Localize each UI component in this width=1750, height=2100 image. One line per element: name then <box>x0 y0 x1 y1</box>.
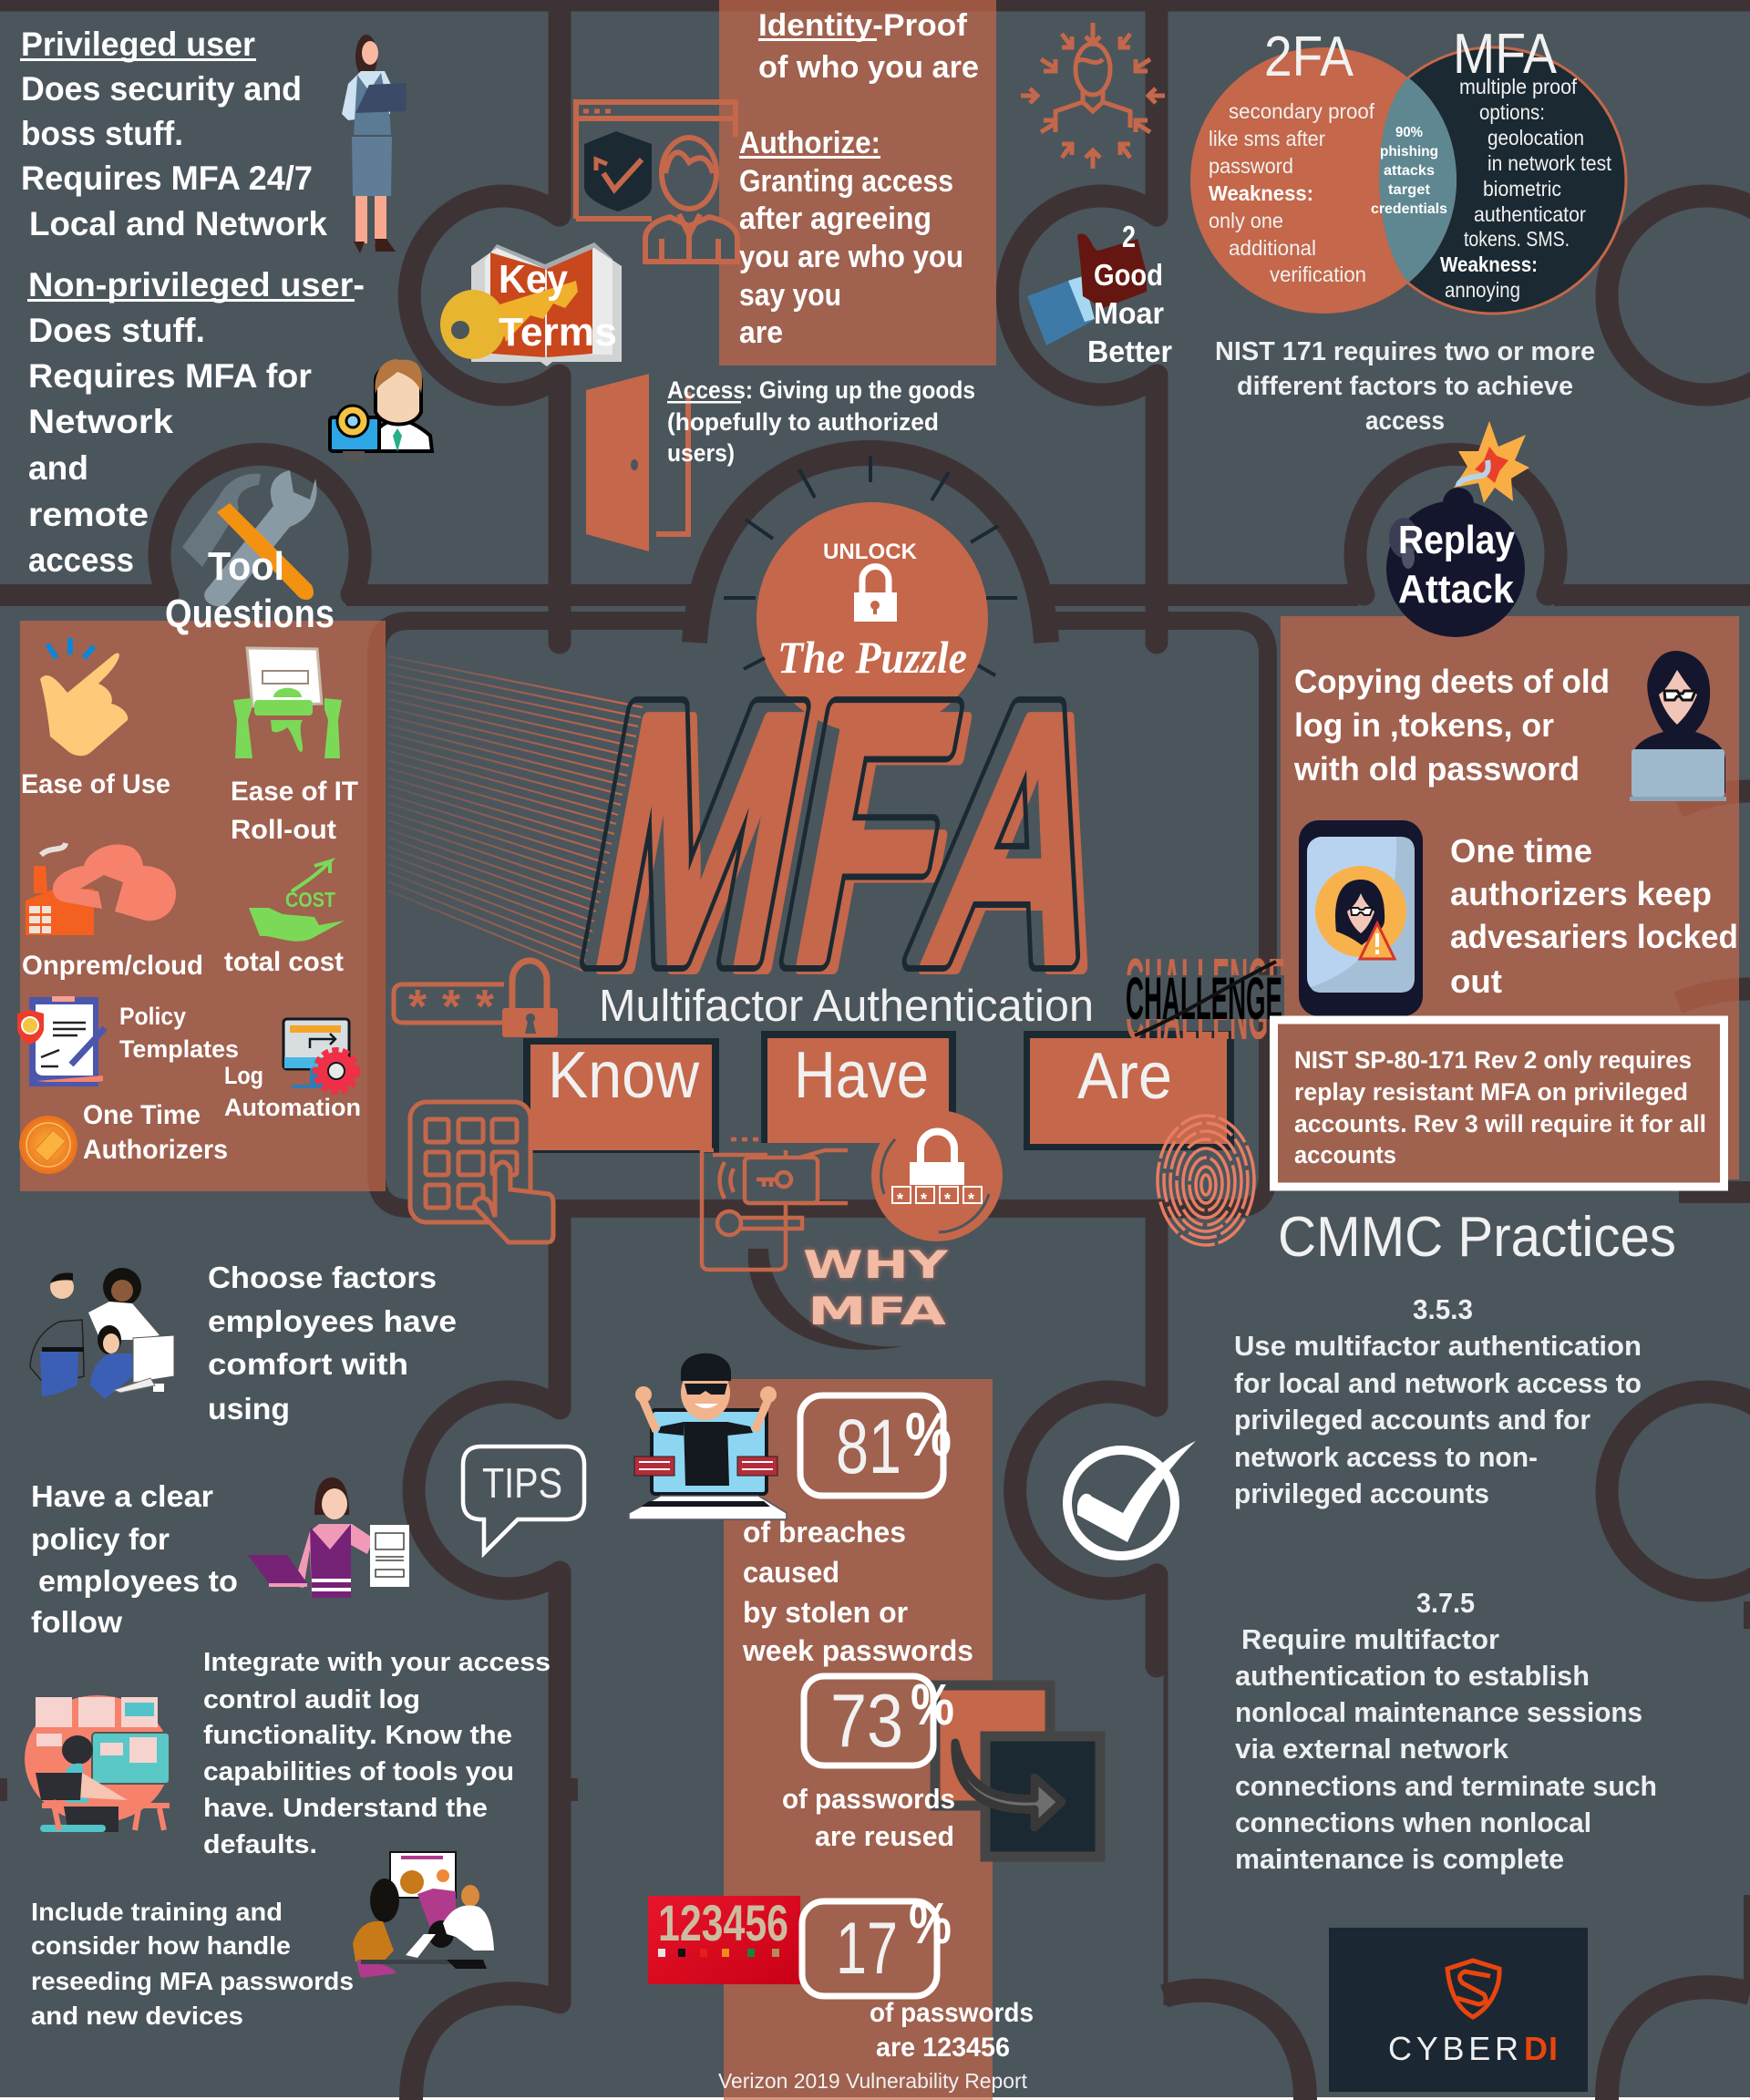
icon: keypad with finger <box>410 1102 553 1242</box>
text: tip integrate with audit log <box>203 1648 551 1859</box>
venn diagram: 2FA and MFA: tokens. SMS. <box>1464 227 1570 251</box>
text: 2 good moar better: Good <box>1094 258 1163 292</box>
text: non-privileged user: and <box>28 449 88 487</box>
icon: phone with hacker warning <box>1299 820 1423 1016</box>
venn diagram: 2FA and MFA: biometric <box>1483 177 1561 201</box>
text: non-privileged user: access <box>28 541 134 579</box>
venn diagram: 2FA and MFA: like sms after <box>1209 127 1325 150</box>
text: access definition <box>667 376 975 467</box>
image: red 123456: 123456 <box>658 1894 788 1951</box>
text: non-privileged user: Network <box>28 403 173 440</box>
text: practice 3.5.3: privileged accounts and for <box>1234 1404 1590 1436</box>
icon: circle lock with asterisks: * <box>921 1190 927 1209</box>
venn diagram: 2FA and MFA: credentials <box>1371 201 1447 217</box>
heading: CMMC practices: CMMC Practices <box>1278 1206 1676 1269</box>
text: one time authorizers: Authorizers <box>83 1135 228 1165</box>
venn diagram: 2FA and MFA: options: <box>1479 100 1545 124</box>
text: privileged user: Local and Network <box>29 205 327 242</box>
venn diagram: 2FA and MFA: Weakness: <box>1209 181 1313 205</box>
text: practice 3.7.5: 3.7.5 <box>1416 1587 1475 1619</box>
icon: cost hand: COST <box>285 888 335 911</box>
text: policy templates: Policy <box>119 1003 186 1030</box>
icon: thumbs up <box>1027 233 1147 345</box>
heading: why MFA: WHY <box>803 1242 949 1287</box>
stat: 17 percent 123456 <box>802 1890 1034 2063</box>
icon: TIPS speech bubble: TIPS <box>482 1459 562 1507</box>
text: one time authorizers: One time <box>1450 832 1592 870</box>
text: practice 3.5.3 <box>1234 1293 1642 1509</box>
text: practice 3.7.5: maintenance is complete <box>1235 1843 1564 1875</box>
text: privileged user: Does security and <box>21 70 302 108</box>
text: practice 3.5.3: for local and network access to <box>1234 1367 1642 1399</box>
text: practice 3.5.3: 3.5.3 <box>1413 1293 1473 1325</box>
panel: why MFA statistics <box>724 1379 993 2100</box>
stat: 17 percent 123456: of passwords <box>870 1998 1034 2028</box>
text: policy templates <box>119 1003 239 1063</box>
stat: 81 percent of breaches: caused <box>743 1556 839 1589</box>
text: tip integrate with audit log: capabilities of tools you <box>203 1757 514 1786</box>
text: tip choose factors: comfort with <box>208 1347 408 1381</box>
text: tip training: reseeding MFA passwords <box>31 1967 354 1995</box>
text: practice 3.7.5 <box>1235 1587 1657 1875</box>
stat: 73 percent reused: 73 <box>830 1678 903 1763</box>
text: tip choose factors: employees have <box>208 1304 457 1338</box>
stat: 73 percent reused: of passwords <box>782 1783 955 1815</box>
venn diagram: 2FA and MFA: verification <box>1270 262 1366 286</box>
text: NIST 171 requirement: different factors to achieve <box>1237 372 1573 401</box>
speed lines behind MFA <box>388 656 643 971</box>
stat: 81 percent of breaches: % <box>905 1400 952 1469</box>
text: tip training <box>31 1898 354 2030</box>
panel: identity and authorize <box>719 0 996 365</box>
callout: NIST SP-800-171 note <box>1274 1020 1724 1187</box>
text: tip choose factors <box>208 1261 457 1426</box>
venn diagram: 2FA and MFA: password <box>1209 154 1293 178</box>
text: CHALLENGE <box>1126 981 1285 1054</box>
venn diagram: 2FA and MFA: geolocation <box>1488 126 1584 149</box>
icon: check mark <box>1067 1441 1196 1556</box>
text: replay attack description <box>1293 663 1610 788</box>
icon: circle lock with asterisks: * <box>968 1190 974 1209</box>
icon: fingerprint <box>1158 1116 1254 1245</box>
text: onprem cloud and total cost: total cost <box>224 947 344 977</box>
icon: hooded hacker <box>1630 651 1726 801</box>
stat: 81 percent of breaches: 81 <box>836 1404 901 1489</box>
puzzle stubs <box>0 1249 1750 1987</box>
icon: analyst at desk <box>25 1695 170 1832</box>
callout: NIST SP-800-171 note: accounts. Rev 3 will require it for all <box>1294 1110 1706 1138</box>
title: MFA: MFA <box>570 641 1150 1045</box>
text: tip integrate with audit log: control audit log <box>203 1685 420 1714</box>
text: ease of use and ease of IT: Ease of IT <box>231 777 358 807</box>
text: one time authorizers: One Time <box>83 1100 201 1130</box>
text: log automation <box>224 1062 361 1121</box>
text: identity and authorize: are <box>739 315 783 350</box>
heading: tool questions: Tool <box>208 544 284 589</box>
text: tip clear policy: follow <box>31 1605 122 1639</box>
icon: challenge wordmark <box>1127 958 1284 1039</box>
icon: policy clipboard <box>17 996 105 1086</box>
stat: 81 percent of breaches: week passwords <box>742 1634 973 1667</box>
text: NIST 171 requirement <box>1215 337 1595 436</box>
venn diagram: 2FA and MFA: 2FA <box>1264 26 1354 88</box>
icon: robotic card press <box>233 648 342 758</box>
venn diagram: 2FA and MFA: 90% <box>1395 125 1423 140</box>
heading: why MFA <box>803 1242 949 1333</box>
text: access definition: Access: Giving up the goods <box>667 376 975 404</box>
venn diagram: 2FA and MFA: in network test <box>1488 151 1612 175</box>
venn diagram: 2FA and MFA: additional <box>1229 236 1316 260</box>
heading: tool questions <box>165 544 335 636</box>
icon: shield and user authorization <box>576 102 737 262</box>
text: practice 3.7.5: connections when nonlocal <box>1235 1807 1591 1838</box>
text: access definition: users) <box>667 439 735 467</box>
text: 2 good moar better: Moar <box>1094 296 1164 330</box>
panel: tool questions <box>20 621 386 1191</box>
text: one time authorizers: authorizers keep <box>1450 875 1712 912</box>
text: privileged user: Requires MFA 24/7 <box>21 160 313 197</box>
stat: 81 percent of breaches <box>742 1395 973 1667</box>
text: privileged user: Privileged user <box>21 26 255 63</box>
stat: 73 percent reused <box>782 1672 955 1852</box>
subtitle: multifactor authentication: Multifactor Authentication <box>599 982 1094 1031</box>
icon: woman with laptop and document <box>248 1477 409 1598</box>
text: one time authorizers <box>1450 832 1738 1000</box>
logo: CyberDI <box>1329 1928 1588 2092</box>
card: are factor: Are <box>1077 1040 1172 1113</box>
icon: team of employees <box>30 1268 174 1399</box>
text: practice 3.5.3: privileged accounts <box>1234 1477 1489 1509</box>
text: 2 good moar better <box>1087 220 1172 368</box>
icon: circle lock with asterisks: * <box>944 1190 951 1209</box>
heading: replay attack: Attack <box>1398 567 1514 612</box>
text: CHALLENGE <box>1126 946 1285 1019</box>
title: MFA <box>580 696 1088 974</box>
text: replay attack description: with old password <box>1293 750 1580 788</box>
text: non-privileged user: Non-privileged user- <box>28 266 365 304</box>
icon: password and padlock <box>394 961 558 1037</box>
text: tip training: and new devices <box>31 2002 243 2030</box>
text: non-privileged user: remote <box>28 496 149 533</box>
venn diagram: 2FA and MFA: MFA <box>1453 23 1558 86</box>
icon: key terms book and key <box>440 242 622 366</box>
stat: 73 percent reused: % <box>911 1672 954 1737</box>
text: one time authorizers: advesariers locked <box>1450 918 1738 955</box>
icon: door <box>586 374 688 551</box>
icon: circle lock with asterisks <box>871 1110 1003 1241</box>
text: non-privileged user: Does stuff. <box>28 312 205 349</box>
card: know factor <box>523 1038 719 1153</box>
card: have factor <box>761 1031 956 1143</box>
icon: wrench and hammer <box>182 470 317 606</box>
text: practice 3.7.5: via external network <box>1235 1733 1509 1765</box>
text: log automation: Log <box>224 1062 263 1089</box>
text: onprem cloud and total cost <box>22 947 344 981</box>
text: identity and authorize: Granting access <box>739 164 953 199</box>
card: are factor <box>1024 1031 1234 1150</box>
stat: 17 percent 123456: % <box>909 1890 952 1956</box>
icon: reused password swap squares <box>935 1685 1100 1857</box>
icon: TIPS speech bubble <box>463 1446 584 1553</box>
text: identity and authorize: of who you are <box>758 50 979 85</box>
stat: 17 percent 123456: 17 <box>836 1908 898 1990</box>
text: tip clear policy: policy for <box>31 1522 170 1556</box>
text: tip clear policy: employees to <box>38 1564 238 1598</box>
icon: circle lock with asterisks: * <box>897 1190 903 1209</box>
text: privileged user <box>20 26 327 242</box>
text: 2 good moar better: Better <box>1087 335 1172 368</box>
icon: person with inward arrows <box>1021 23 1165 169</box>
heading: why MFA: MFA <box>808 1289 947 1333</box>
text: practice 3.7.5: Require multifactor <box>1241 1623 1499 1655</box>
text: tip choose factors: using <box>208 1392 290 1426</box>
panel: replay attack <box>1281 616 1739 1179</box>
icon: burglar in laptop <box>629 1354 787 1519</box>
text: tip integrate with audit log: functionality. Know the <box>203 1721 512 1750</box>
text: onprem cloud and total cost: Onprem/cloud <box>22 951 203 981</box>
venn diagram: 2FA and MFA: Weakness: <box>1440 252 1538 276</box>
heading: key terms <box>499 257 617 355</box>
venn diagram: 2FA and MFA: phishing <box>1380 144 1438 160</box>
venn diagram: 2FA and MFA: only one <box>1209 209 1283 232</box>
text: non-privileged user <box>27 266 365 579</box>
text: NIST 171 requirement: access <box>1365 407 1445 436</box>
text: tip choose factors: Choose factors <box>208 1261 437 1294</box>
text: tip integrate with audit log: have. Understand the <box>203 1794 488 1823</box>
text: identity and authorize: Authorize: <box>739 126 880 160</box>
venn diagram: 2FA and MFA <box>1190 23 1626 314</box>
text: privileged user: boss stuff. <box>21 115 183 152</box>
venn diagram: 2FA and MFA: multiple proof <box>1459 75 1578 98</box>
heading: replay attack: Replay <box>1398 518 1515 562</box>
stat: 17 percent 123456: are 123456 <box>876 2033 1010 2063</box>
text: tip integrate with audit log: Integrate with your access <box>203 1648 551 1677</box>
text: tip clear policy: Have a clear <box>31 1479 213 1513</box>
text: replay attack description: log in ,tokens, or <box>1294 706 1554 744</box>
text: replay attack description: Copying deets of old <box>1294 663 1610 700</box>
text: access definition: (hopefully to authorized <box>667 408 939 436</box>
venn diagram: 2FA and MFA: authenticator <box>1474 202 1586 226</box>
text: policy templates: Templates <box>119 1035 239 1063</box>
heading: why MFA: WHY <box>803 1242 949 1287</box>
text: tip training: consider how handle <box>31 1931 291 1960</box>
callout: NIST SP-800-171 note: NIST SP-80-171 Rev 2 only requires <box>1294 1046 1692 1074</box>
callout: NIST SP-800-171 note: accounts <box>1294 1141 1396 1168</box>
icon: business woman <box>342 35 407 253</box>
icon: team meeting <box>353 1852 494 1978</box>
source note: Verizon 2019 Vulnerability Report <box>718 2069 1028 2093</box>
text: 2 good moar better: 2 <box>1122 220 1136 253</box>
stat: 73 percent reused: are reused <box>815 1820 954 1852</box>
text: identity and authorize <box>739 8 979 350</box>
callout: NIST SP-800-171 note: replay resistant MFA on privileged <box>1294 1078 1688 1106</box>
icon: bomb <box>1386 421 1529 637</box>
text: tip training: Include training and <box>31 1898 283 1926</box>
text: practice 3.7.5: authentication to establish <box>1235 1660 1590 1692</box>
card: have factor: Have <box>794 1039 929 1112</box>
text: CHALLENGE <box>1126 964 1282 1032</box>
venn diagram: 2FA and MFA: annoying <box>1445 278 1520 302</box>
text: one time authorizers <box>83 1100 228 1165</box>
text: ease of use and ease of IT <box>21 769 358 845</box>
text: practice 3.5.3: Use multifactor authentication <box>1234 1330 1642 1362</box>
text: log automation: Automation <box>224 1094 361 1121</box>
icon: monitor with gear <box>283 1019 356 1091</box>
heading: key terms: Key <box>499 257 568 302</box>
text: NIST 171 requirement: NIST 171 requires two or more <box>1215 337 1595 366</box>
card: know factor: Know <box>548 1039 700 1112</box>
stat: 81 percent of breaches: by stolen or <box>743 1596 908 1629</box>
icon: cost hand <box>249 861 345 942</box>
text: one time authorizers: out <box>1450 962 1502 1000</box>
text: identity and authorize: after agreeing <box>739 201 932 236</box>
heading: replay attack <box>1398 518 1515 612</box>
venn diagram: 2FA and MFA: attacks <box>1384 163 1435 179</box>
text: non-privileged user: Requires MFA for <box>28 357 312 395</box>
unlock the puzzle badge: UNLOCK <box>823 540 918 564</box>
text: practice 3.7.5: nonlocal maintenance sessions <box>1235 1696 1642 1728</box>
icon: easy finger snap <box>40 638 128 756</box>
text: ease of use and ease of IT: Roll-out <box>231 815 336 845</box>
heading: key terms: Terms <box>499 310 617 355</box>
icon: office worker avatar <box>330 359 432 462</box>
venn diagram: 2FA and MFA: secondary proof <box>1229 99 1375 123</box>
text: practice 3.5.3: network access to non- <box>1234 1441 1538 1473</box>
text: identity and authorize: Identity-Proof <box>758 8 968 43</box>
text: identity and authorize: say you <box>739 278 841 313</box>
text: tip clear policy <box>31 1479 238 1639</box>
text: tip integrate with audit log: defaults. <box>203 1830 317 1859</box>
logo: CyberDI: CYBER <box>1388 2030 1518 2067</box>
icon: orange coin <box>19 1116 77 1174</box>
image: red 123456 <box>648 1894 800 1984</box>
icon: phone with key <box>702 1139 848 1270</box>
heading: why MFA: MFA <box>808 1289 947 1333</box>
text: identity and authorize: you are who you <box>739 240 963 274</box>
logo: CyberDI: DI <box>1524 2030 1558 2067</box>
unlock the puzzle badge <box>724 456 1017 734</box>
text: ease of use and ease of IT: Ease of Use <box>21 769 170 799</box>
text: practice 3.7.5: connections and terminate such <box>1235 1770 1657 1802</box>
heading: tool questions: Questions <box>165 592 335 636</box>
venn diagram: 2FA and MFA: target <box>1388 182 1431 198</box>
stat: 81 percent of breaches: of breaches <box>743 1516 906 1549</box>
icon: factory and cloud <box>26 843 176 935</box>
unlock the puzzle badge: The Puzzle <box>777 632 967 683</box>
icon: password and padlock: *** <box>408 981 495 1034</box>
